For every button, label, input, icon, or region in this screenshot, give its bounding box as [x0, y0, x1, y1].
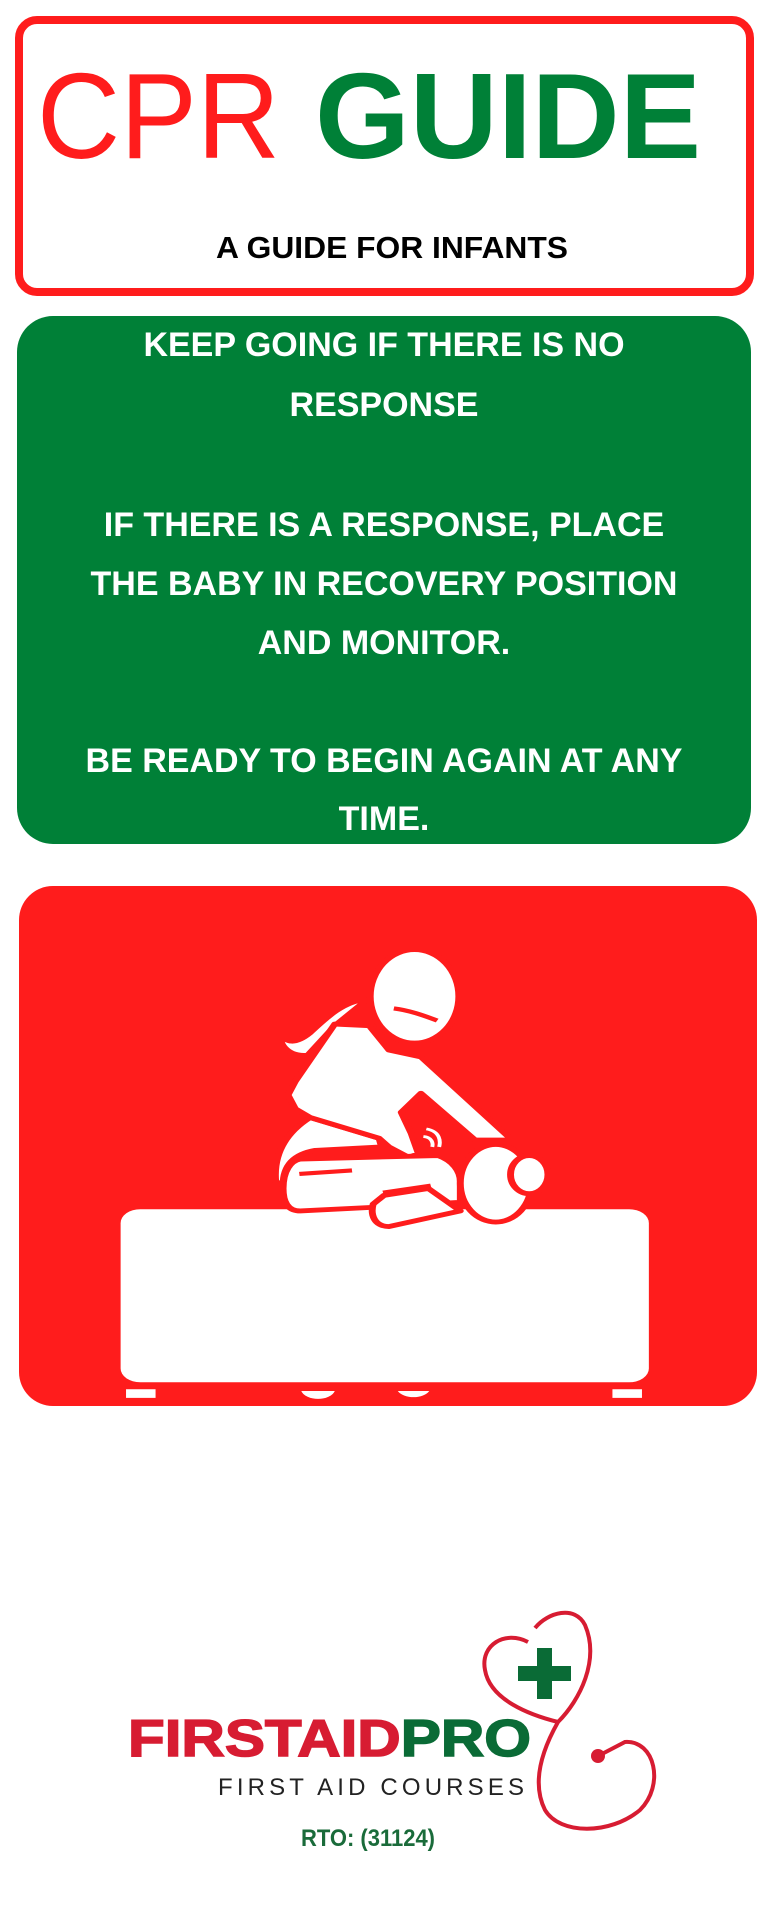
- text: keep going: RESPONSE: [290, 386, 478, 424]
- logo: FirstAidPro: RTO: (31124): [301, 1825, 435, 1852]
- text: be ready: TIME.: [339, 800, 429, 838]
- logo: FirstAidPro: [128, 1610, 656, 1852]
- text: if response: [90, 506, 677, 662]
- text: be ready: BE READY TO BEGIN AGAIN AT ANY: [86, 742, 682, 780]
- logo wordmark: FIRSTAID PRO: [128, 1710, 531, 1768]
- icon: stethoscope heart: [484, 1613, 654, 1829]
- logo: FirstAidPro: FIRST AID COURSES: [218, 1774, 524, 1801]
- title text: A GUIDE FOR INFANTS: [216, 230, 568, 265]
- text: if response: AND MONITOR.: [258, 624, 510, 662]
- text: keep going: [143, 326, 625, 424]
- title text: GUIDE: [315, 48, 701, 184]
- text: be ready: [86, 742, 682, 838]
- panel: illustration: [19, 886, 757, 1406]
- text: keep going: KEEP GOING IF THERE IS NO: [143, 326, 625, 364]
- icon: cross: [518, 1648, 571, 1699]
- text: if response: IF THERE IS A RESPONSE, PLACE: [104, 506, 664, 544]
- illustration: infant CPR: [120, 952, 649, 1399]
- text: if response: THE BABY IN RECOVERY POSITION: [91, 565, 677, 603]
- title text: CPR: [37, 48, 280, 184]
- title box: [15, 16, 754, 296]
- title text: [37, 48, 701, 265]
- panel: instructions: [17, 316, 751, 844]
